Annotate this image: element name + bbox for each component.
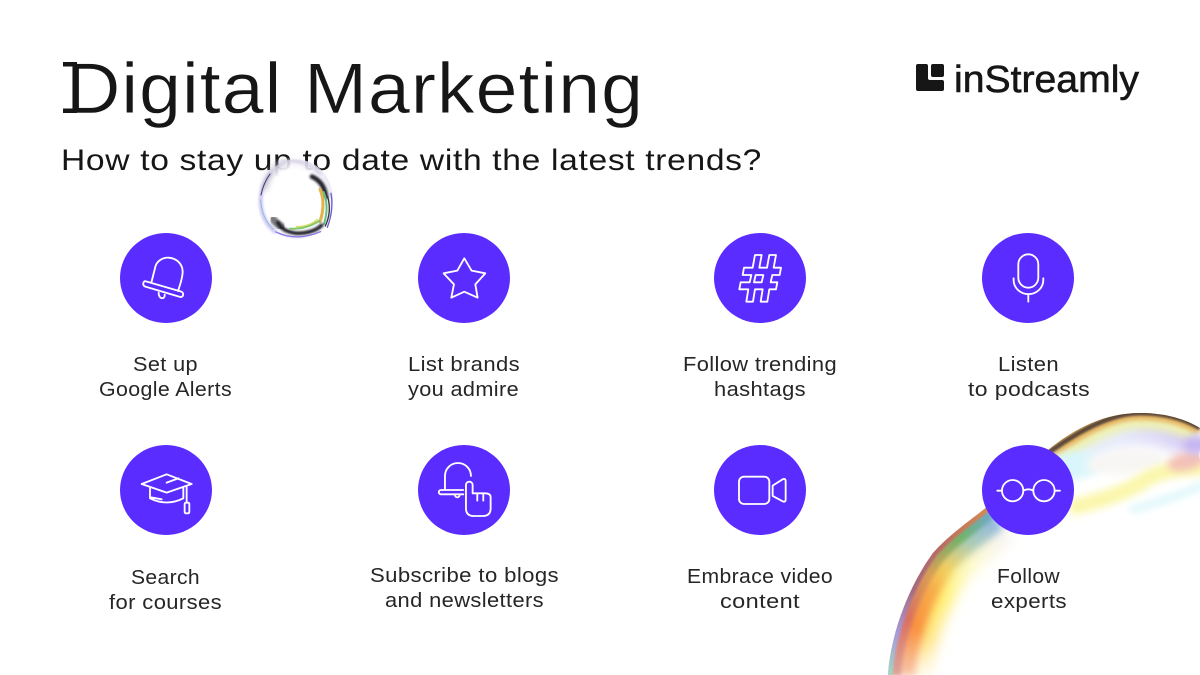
- label line 2: content: [720, 591, 800, 613]
- title: Digital Marketing: [66, 50, 644, 129]
- label: List brands: [408, 354, 520, 376]
- label: Embrace video: [687, 566, 833, 588]
- icon: microphone: [982, 233, 1074, 323]
- icon: hashtag: [714, 233, 806, 323]
- label line 2: and newsletters: [385, 590, 544, 612]
- label: Search: [131, 567, 200, 589]
- label line 2: you admire: [408, 379, 519, 401]
- label: Follow: [997, 566, 1060, 588]
- subtitle: How to stay up to date with the latest trends?: [61, 144, 762, 177]
- icon: star: [418, 233, 510, 323]
- logo mark: [916, 64, 944, 91]
- item: List brands you admire: [408, 233, 520, 401]
- item: Embrace video content: [687, 445, 833, 613]
- label line 2: Google Alerts: [99, 379, 232, 401]
- item: Listen to podcasts: [968, 233, 1090, 401]
- label line 2: experts: [991, 591, 1067, 613]
- icon: video camera: [714, 445, 806, 535]
- label line 2: for courses: [109, 592, 222, 614]
- logo wordmark: inStreamly: [954, 59, 1139, 101]
- label: Follow trending: [683, 354, 837, 376]
- label line 2: hashtags: [714, 379, 806, 401]
- small soap bubble: [260, 159, 333, 239]
- label line 2: to podcasts: [968, 379, 1090, 401]
- icon: bell: [120, 233, 212, 323]
- icon: glasses: [982, 445, 1074, 535]
- label: Listen: [998, 354, 1059, 376]
- item: Subscribe to blogs and newsletters: [370, 445, 559, 612]
- item: Follow trending hashtags: [683, 233, 837, 401]
- icon: graduation cap: [120, 445, 212, 535]
- rainbow bubble: [888, 413, 1200, 675]
- item: Search for courses: [109, 445, 222, 614]
- logo: inStreamly: [916, 59, 1139, 101]
- icon: bell with pointing hand: [418, 445, 510, 535]
- label: Set up: [133, 354, 198, 376]
- item: Set up Google Alerts: [99, 233, 232, 401]
- label: Subscribe to blogs: [370, 565, 559, 587]
- item: Follow experts: [982, 445, 1074, 613]
